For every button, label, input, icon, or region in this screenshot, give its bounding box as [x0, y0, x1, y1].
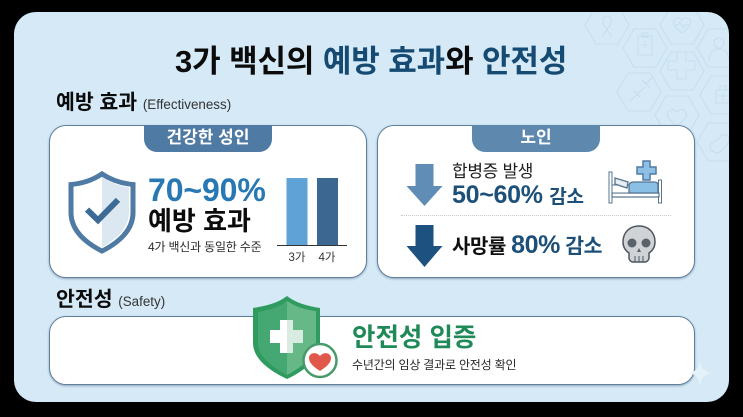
tab: elderly: [472, 125, 600, 152]
panel: elderly: [377, 125, 695, 278]
text: mortality 80% decrease: 사망률 80% 감소: [452, 231, 602, 259]
icon: green shield: [253, 296, 338, 379]
tab: healthy adults: [144, 125, 272, 152]
text: safety proven: 안전성 입증: [352, 324, 476, 352]
tab: healthy adults: 건강한 성인: [167, 128, 249, 147]
icon: down arrow light: [406, 164, 442, 206]
text: same level as quadrivalent: 4가 백신과 동일한 수준: [148, 240, 261, 254]
icon: skull: [622, 225, 656, 263]
icon: hospital bed: [608, 160, 662, 204]
text: years of clinical results: 수년간의 임상 결과로 안전성 확인: [352, 358, 516, 372]
icon: shield with check: [68, 171, 136, 254]
heading: safety: 안전성 (Safety): [56, 288, 165, 311]
bar: trivalent: [286, 178, 308, 245]
divider: [401, 215, 671, 216]
icon: down arrow dark: [406, 225, 442, 267]
panel: healthy adults: [49, 125, 367, 278]
icon: sparkle: [690, 361, 710, 385]
panel: safety: [49, 316, 695, 385]
bar: quadrivalent: [317, 178, 338, 245]
bar chart: [277, 178, 347, 264]
stat: 50~60% decrease: 50~60% 감소: [452, 181, 584, 209]
heading: effectiveness: 예방 효과 (Effectiveness): [56, 91, 231, 114]
text: complications: 합병증 발생: [452, 162, 533, 181]
stat: 70~90%: 70~90%: [148, 172, 266, 208]
text: prevention effect: 예방 효과: [148, 206, 251, 236]
tab: elderly: 노인: [520, 128, 552, 147]
title: 3가 백신의 예방 효과와 안전성: [175, 44, 567, 79]
bar chart: 4가: [319, 251, 336, 264]
bar chart: 3가: [289, 251, 306, 264]
